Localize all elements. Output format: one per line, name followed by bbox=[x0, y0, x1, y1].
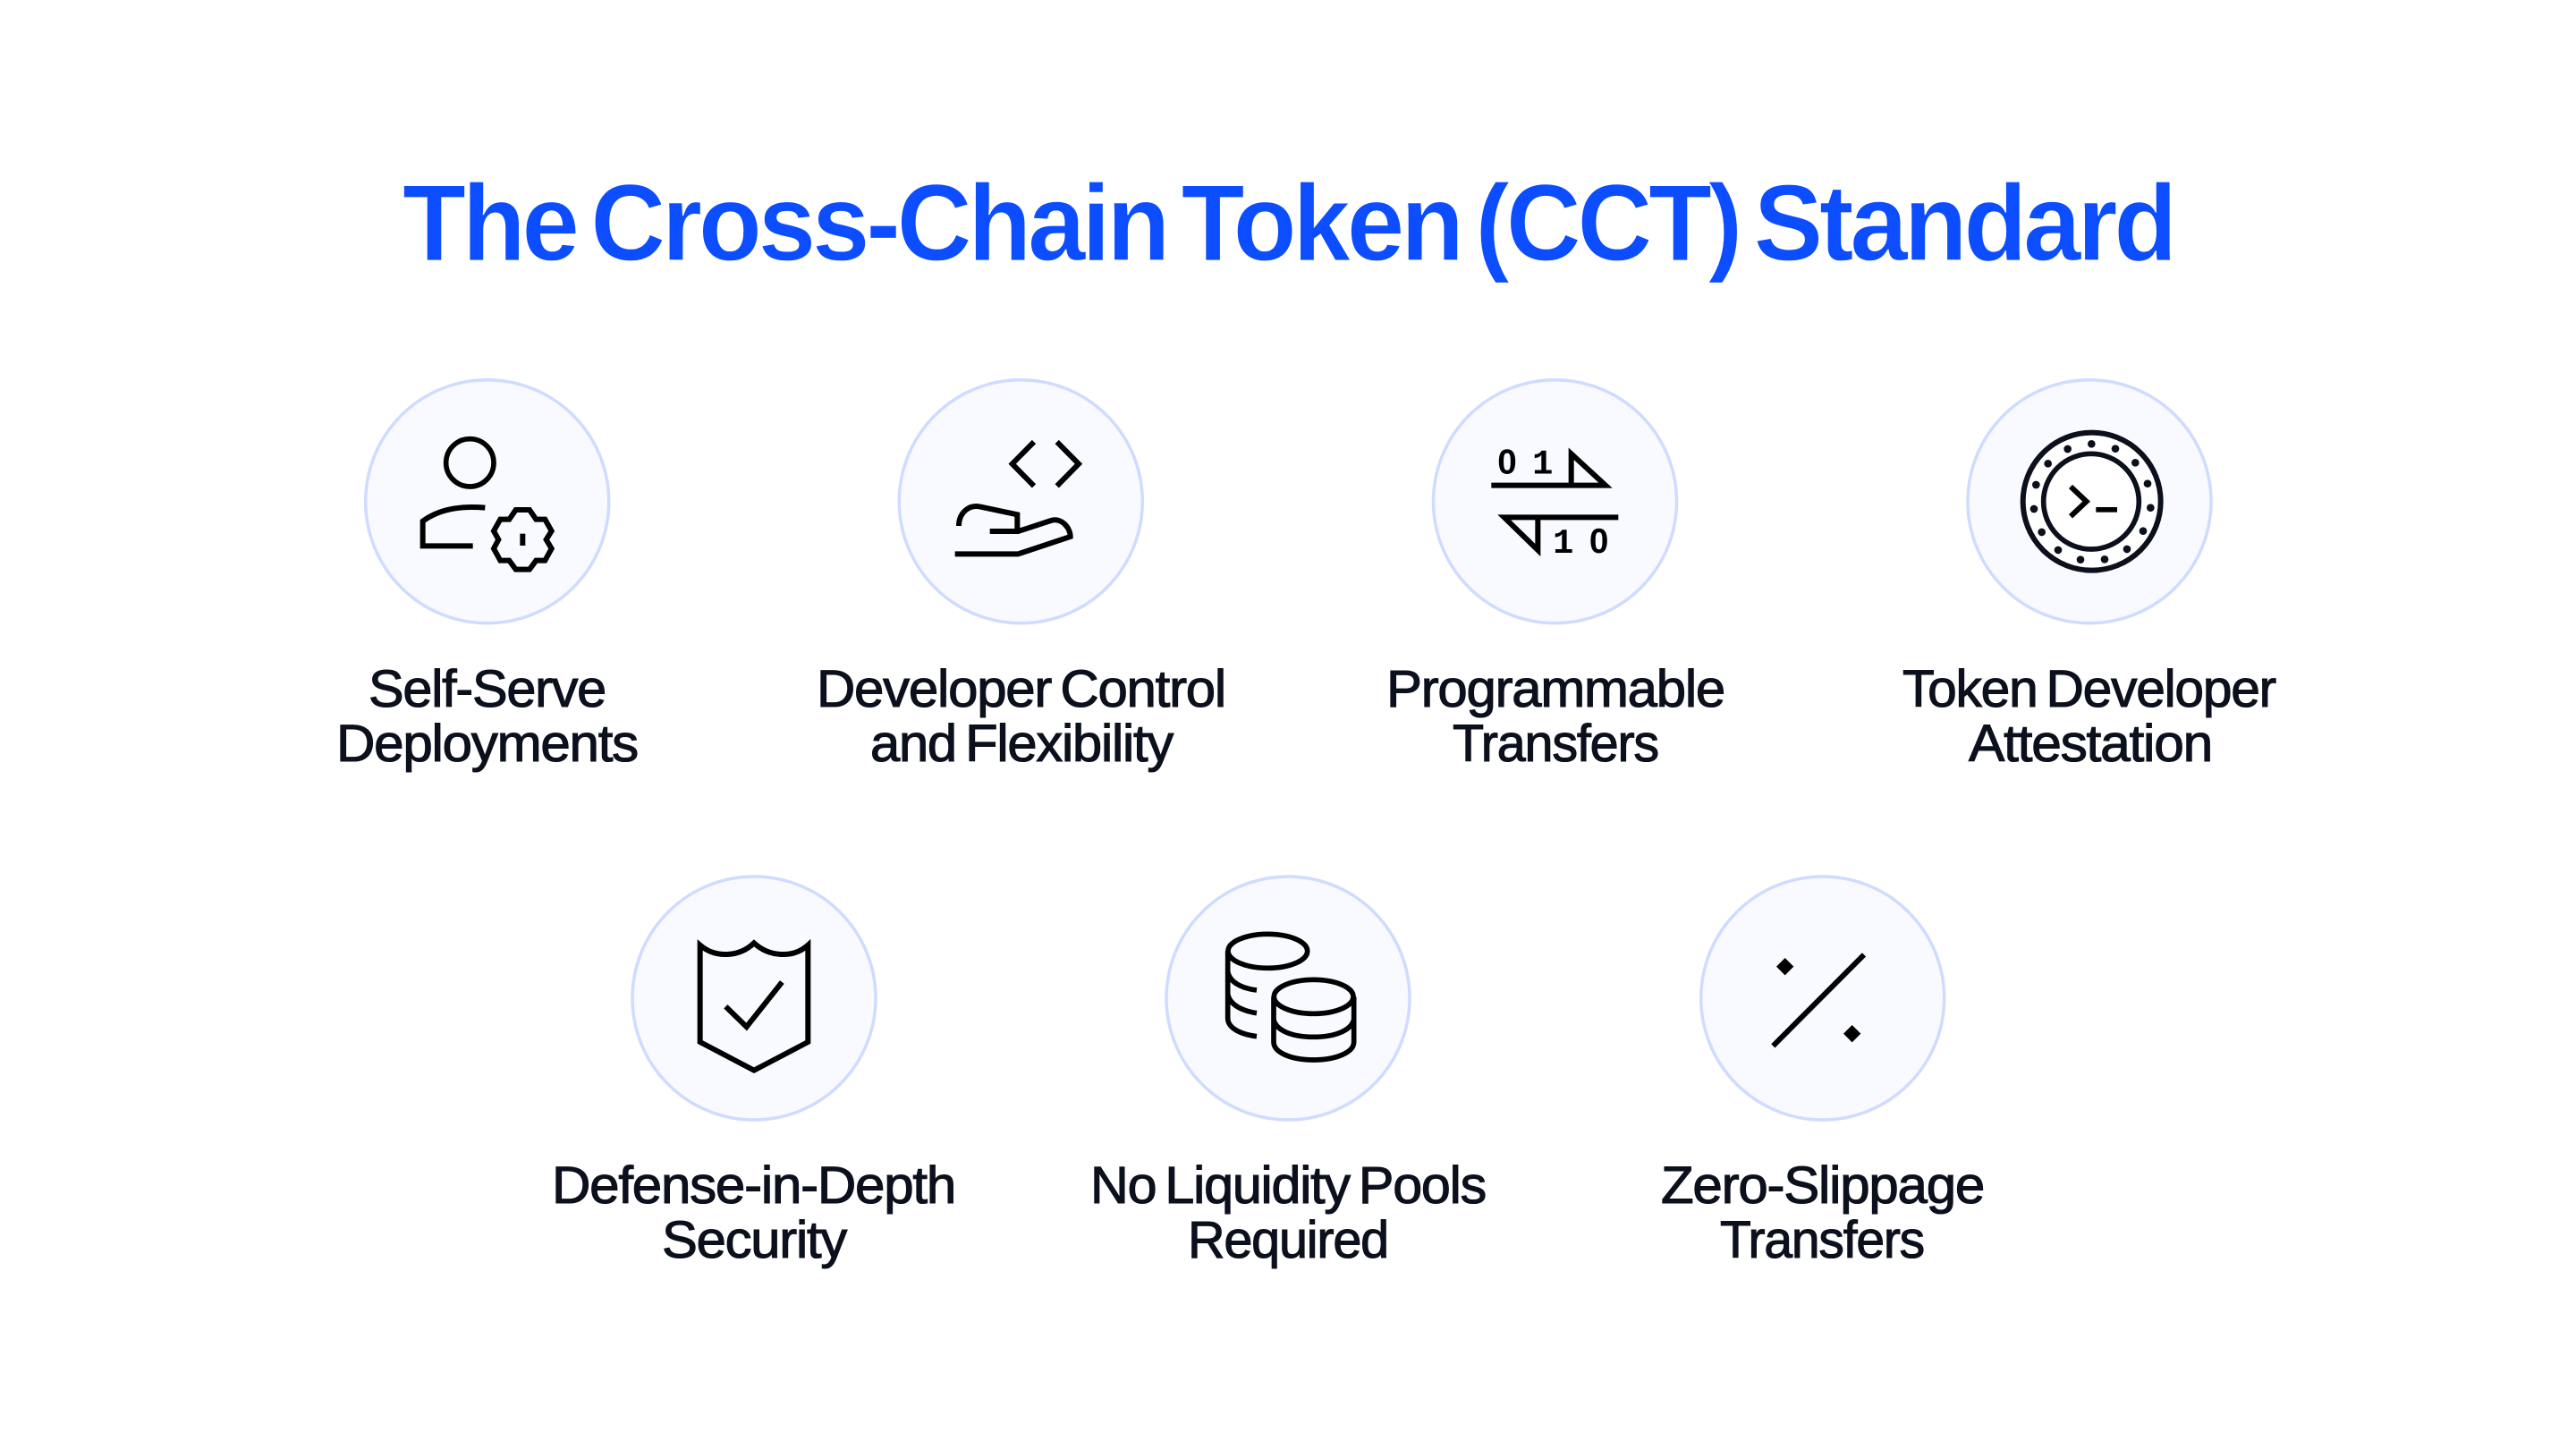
panel: Programmable Transfers bbox=[1386, 380, 1724, 773]
panel: Defense-in-Depth Security bbox=[552, 877, 955, 1269]
label bbox=[336, 660, 638, 773]
icon circle bbox=[1166, 877, 1410, 1120]
icon: percent bbox=[1773, 954, 1864, 1046]
panel: Developer Control and Flexibility bbox=[817, 380, 1225, 773]
icon circle bbox=[899, 380, 1142, 623]
panel: Zero-Slippage Transfers bbox=[1661, 877, 1984, 1269]
label: Transfers bbox=[1720, 1211, 1924, 1269]
label: Attestation bbox=[1969, 715, 2212, 773]
icon: coin stacks bbox=[1228, 934, 1354, 1060]
icon circle bbox=[366, 380, 609, 623]
label: No Liquidity Pools bbox=[1090, 1157, 1486, 1215]
icon: binary transfer bbox=[1491, 443, 1618, 564]
icon: user with gear bbox=[423, 439, 552, 570]
label: Self-Serve bbox=[369, 660, 606, 718]
label bbox=[817, 660, 1225, 773]
label: Deployments bbox=[336, 715, 638, 773]
icon: terminal token bbox=[2023, 433, 2161, 571]
label: Programmable bbox=[1386, 660, 1724, 718]
icon circle bbox=[1433, 380, 1676, 623]
label: Developer Control bbox=[817, 660, 1225, 718]
panel: Token Developer Attestation bbox=[1902, 380, 2276, 773]
label: and Flexibility bbox=[870, 715, 1174, 773]
label bbox=[1386, 660, 1724, 773]
icon: binary transfer: 1 bbox=[1532, 445, 1553, 484]
icon: binary transfer: 1 bbox=[1553, 524, 1573, 564]
panel: Self-Serve Deployments bbox=[336, 380, 638, 773]
title: The Cross-Chain Token (CCT) Standard bbox=[402, 162, 2174, 284]
icon circle bbox=[1968, 380, 2211, 623]
label: Zero-Slippage bbox=[1661, 1157, 1984, 1215]
icon circle bbox=[1701, 877, 1945, 1120]
label bbox=[1661, 1157, 1984, 1269]
icon circle bbox=[632, 877, 876, 1120]
icon: hand with code brackets bbox=[955, 442, 1079, 554]
label bbox=[1090, 1157, 1486, 1269]
icon: binary transfer: 0 bbox=[1497, 443, 1517, 481]
label: Transfers bbox=[1453, 715, 1658, 773]
icon: binary transfer: 0 bbox=[1589, 522, 1608, 561]
panel: No Liquidity Pools Required bbox=[1090, 877, 1486, 1269]
icon: shield with check bbox=[700, 943, 808, 1071]
label: Token Developer bbox=[1902, 660, 2276, 718]
label: Defense-in-Depth bbox=[552, 1157, 955, 1215]
label: Security bbox=[662, 1211, 847, 1269]
label: Required bbox=[1188, 1211, 1388, 1269]
label bbox=[1902, 660, 2276, 773]
label bbox=[552, 1157, 955, 1269]
